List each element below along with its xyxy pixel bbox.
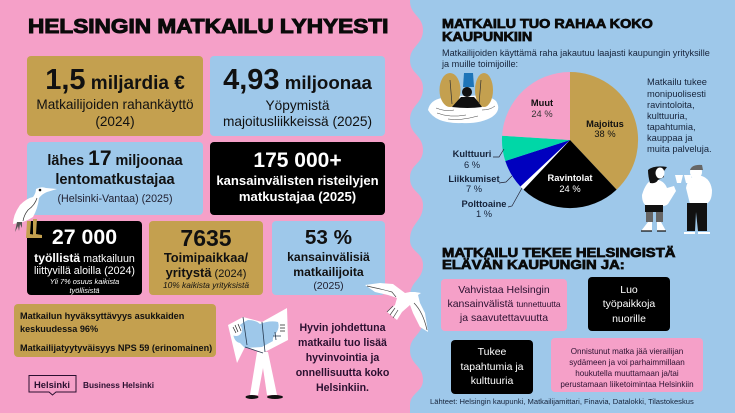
panel: cruise passengers	[210, 142, 385, 215]
pie value: Kulttuuri: 6 %	[464, 160, 480, 170]
panel: international visitors: (2025)	[313, 280, 344, 292]
logo: Helsinki and Business Helsinki: Business Helsinki	[83, 380, 154, 390]
panel: youth jobs: Luo	[620, 284, 638, 296]
panel: overnight stays: 4,93 miljoonaa	[223, 64, 372, 96]
text block: what tourism supports	[647, 77, 712, 154]
text block: intro: Matkailijoiden käyttämä raha jakautuu laajasti kaupungin yrityksille	[442, 48, 710, 58]
panel: cruise passengers: matkustajaa (2025)	[239, 189, 356, 204]
panel: events and culture: kulttuuria	[471, 375, 513, 387]
text block: what tourism supports: kauppaa ja	[647, 133, 692, 143]
panel: events and culture: Tukee	[478, 346, 506, 358]
panel: overnight stays: Yöpymistä	[266, 98, 329, 113]
pie label: Kulttuuri: Kulttuuri	[453, 149, 491, 159]
panel: air passengers: lähes 17 miljoonaa	[47, 147, 183, 170]
text block: well-being statement: Hyvin johdettuna	[300, 322, 385, 334]
text block: what tourism supports: tapahtumia,	[647, 122, 696, 132]
text block: what tourism supports: Matkailu tukee	[647, 77, 707, 87]
panel: air passengers: lentomatkustajaa	[55, 172, 175, 188]
panel: overnight stays: majoitusliikkeissä (2025)	[223, 114, 372, 129]
panel: international recognition: ja saavutettavuutta	[460, 312, 548, 324]
pie value: Muut: 24 %	[531, 109, 553, 119]
text block: well-being statement: onnellisuutta koko	[296, 367, 389, 379]
panel: visitor spending: 1,5 miljardia €	[45, 64, 185, 96]
text block: what tourism supports: kulttuuria,	[647, 111, 687, 121]
panel: international visitors	[272, 221, 385, 295]
panel: acceptance and NPS: Matkailun hyväksyttävyys asukkaiden	[20, 311, 184, 321]
panel: visitor spending: Matkailijoiden rahankäyttö	[36, 97, 194, 112]
text block: what tourism supports: muita palveluja.	[647, 144, 712, 154]
panel: cruise passengers: kansainvälisten risteilyjen	[216, 173, 379, 188]
title: HELSINGIN MATKAILU LYHYESTI	[28, 16, 388, 38]
panel: employment: 27 000	[52, 225, 117, 249]
panel: youth jobs: työpaikkoja	[603, 298, 655, 310]
text block: what tourism supports: ravintoloita,	[647, 100, 695, 110]
panel: employment: liittyvillä aloilla (2024)	[34, 265, 135, 277]
panel: events and culture: tapahtumia ja	[460, 361, 524, 373]
panel: visitor spending: (2024)	[95, 114, 135, 129]
text block: well-being statement: matkailu tuo lisää	[298, 337, 387, 349]
text block: sources: Lähteet: Helsingin kaupunki, Matkailijamittari, Finavia, Datalokki, Tilastokeskus	[430, 397, 694, 406]
text block: well-being statement: Helsinkiin.	[316, 382, 369, 394]
pie value: Ravintolat: 24 %	[559, 184, 581, 194]
panel: international visitors: matkailijoita	[293, 265, 364, 279]
logo: Helsinki and Business Helsinki: Helsinki	[34, 379, 70, 390]
panel: employment: työllistä matkailuun	[34, 251, 135, 265]
heading: lively city, second line: ELÄVÄN KAUPUNGIN JA:	[442, 258, 625, 272]
panel: acceptance and NPS	[14, 304, 216, 357]
panel: international visitors: kansainvälisiä	[287, 250, 370, 264]
pie value: Liikkumiset: 7 %	[466, 184, 482, 194]
panel: businesses: Toimipaikkaa/	[164, 250, 248, 265]
heading: money: MATKAILU TUO RAHAA KOKO	[442, 17, 653, 31]
text block: well-being statement: hyvinvointia ja	[306, 352, 379, 364]
text block: well-being statement	[296, 322, 389, 394]
pie label: Polttoaine: Polttoaine	[462, 199, 506, 209]
panel: successful trip: sydämeen ja voi parhaimmillaan	[569, 358, 685, 367]
panel: successful trip: houkutella muuttamaan ja/tai	[575, 369, 679, 378]
pie label: Majoitus: Majoitus	[586, 119, 624, 129]
panel: employment	[27, 221, 142, 295]
panel: air passengers	[27, 142, 203, 215]
text block: what tourism supports: monipuolisesti	[647, 89, 706, 99]
panel: international visitors: 53 %	[305, 226, 352, 249]
pie value: Polttoaine: 1 %	[476, 209, 492, 219]
pie label: Liikkumiset: Liikkumiset	[448, 174, 500, 184]
panel: businesses: yritystä (2024)	[166, 265, 246, 280]
panel: employment: Yli 7% osuus kaikista	[50, 277, 119, 286]
panel: youth jobs: nuorille	[612, 313, 646, 325]
panel: businesses: 10% kaikista yrityksistä	[163, 280, 249, 290]
panel: international recognition: kansainvälistä tunnettuutta	[447, 298, 561, 310]
panel: visitor spending	[27, 56, 203, 136]
logo: Helsinki and Business Helsinki	[28, 375, 154, 396]
pie value: Majoitus: 38 %	[594, 129, 616, 139]
text block: intro: ja muille toimijoille:	[442, 59, 518, 69]
panel: businesses: 7635	[180, 225, 232, 251]
panel: overnight stays	[210, 56, 385, 136]
panel: events and culture	[451, 340, 533, 394]
panel: businesses	[149, 221, 263, 295]
panel: acceptance and NPS: keskuudessa 96%	[20, 324, 98, 334]
panel: successful trip: Onnistunut matka jää vierailijan	[571, 347, 683, 356]
heading: lively city: MATKAILU TEKEE HELSINGISTÄ	[442, 246, 675, 260]
panel: air passengers: (Helsinki-Vantaa) (2025)	[57, 193, 173, 205]
text block: intro	[442, 48, 710, 69]
panel: youth jobs	[588, 277, 670, 331]
panel: successful trip	[551, 338, 703, 392]
panel: international recognition	[441, 279, 567, 331]
pie label: Muut: Muut	[531, 98, 553, 108]
panel: successful trip: perustamaan liiketoimintaa Helsinkiin	[560, 380, 694, 389]
pie label: Ravintolat: Ravintolat	[548, 173, 592, 183]
heading: money, second line: KAUPUNKIIN	[442, 30, 532, 44]
panel: international recognition: Vahvistaa Helsingin	[458, 284, 550, 296]
panel: acceptance and NPS: Matkailijatyytyväisyys NPS 59 (erinomainen)	[20, 343, 212, 353]
panel: employment: työllisistä	[70, 286, 99, 295]
panel: cruise passengers: 175 000+	[253, 149, 342, 172]
